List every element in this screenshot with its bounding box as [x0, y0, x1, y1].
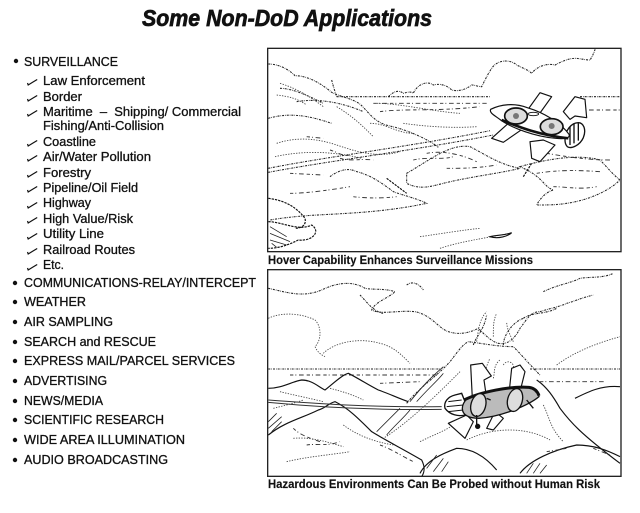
top-level items: AIR SAMPLING — [24, 315, 113, 329]
top-level items — [13, 276, 256, 467]
surveillance sub-items: Forestry — [43, 166, 92, 180]
panel frame — [268, 48, 621, 252]
surveillance sub-items: Pipeline/Oil Field — [43, 181, 138, 195]
top-level items: SEARCH and RESCUE — [24, 335, 156, 349]
hills — [268, 373, 620, 477]
caption: hazardous environments: Hazardous Environments Can Be Probed without Human Risk — [268, 479, 601, 491]
top-level items: WIDE AREA ILLUMINATION — [24, 433, 185, 447]
surveillance sub-items: Highway — [43, 196, 92, 210]
clouds — [388, 49, 596, 96]
road — [268, 131, 493, 172]
surveillance sub-items: Air/Water Pollution — [43, 150, 151, 164]
surveillance sub-items: Border — [43, 90, 82, 104]
top-level items: WEATHER — [24, 295, 86, 309]
shoreline hills — [268, 64, 438, 147]
surveillance sub-items: High Value/Risk — [43, 212, 134, 226]
top-level items: NEWS/MEDIA — [24, 394, 104, 408]
top-level items: EXPRESS MAIL/PARCEL SERVICES — [24, 354, 235, 368]
top-level items: COMMUNICATIONS-RELAY/INTERCEPT — [24, 276, 256, 290]
surveillance sub-items: Utility Line — [43, 227, 104, 241]
surveillance sub-items: Fishing/Anti-Collision — [43, 119, 164, 133]
bullet list — [13, 55, 256, 467]
road — [268, 400, 442, 407]
caption: hover capability: Hover Capability Enhances Surveillance Missions — [268, 255, 533, 267]
coast — [270, 170, 427, 220]
horizon — [336, 96, 620, 98]
volcano — [407, 342, 540, 403]
surveillance sub-items: Law Enforcement — [43, 74, 146, 88]
top-level items: SCIENTIFIC RESEARCH — [24, 413, 164, 427]
panel: hover surveillance illustration — [268, 40, 621, 252]
title: Some Non-DoD Applications — [142, 5, 432, 31]
surveillance sub-items — [28, 74, 241, 272]
top-level items: AUDIO BROADCASTING — [24, 453, 168, 467]
surveillance sub-items: Coastline — [43, 135, 96, 149]
top-level items: ADVERTISING — [24, 374, 107, 388]
panel: hazardous environment illustration — [268, 270, 621, 477]
vtol aircraft — [490, 93, 587, 162]
surveillance sub-items: Railroad Routes — [43, 243, 135, 257]
vtol aircraft — [445, 363, 539, 438]
volcanic plume — [268, 273, 613, 344]
ship — [490, 233, 512, 238]
surveillance sub-items: Maritime – Shipping/ Commercial — [43, 105, 241, 119]
horizon — [268, 368, 620, 370]
scenery — [268, 40, 620, 248]
surveillance sub-items: Etc. — [43, 258, 64, 272]
scenery — [268, 273, 620, 477]
panel frame — [268, 270, 621, 476]
item: surveillance: SURVEILLANCE — [24, 55, 118, 69]
